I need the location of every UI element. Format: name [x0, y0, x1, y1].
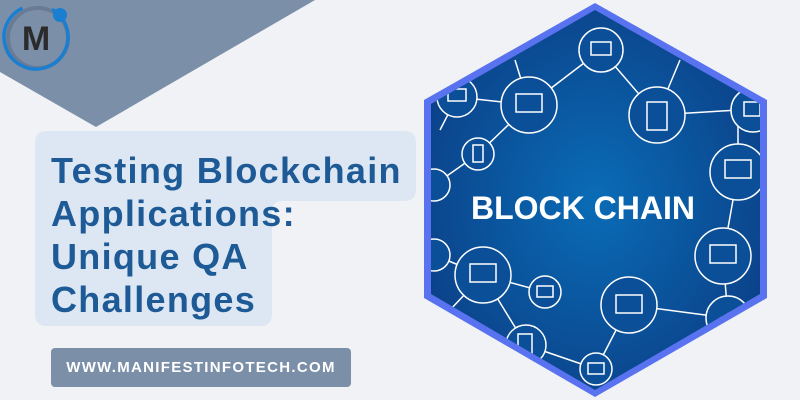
title text: Testing Blockchain: [51, 150, 402, 191]
blockchain hexagon image: [424, 3, 767, 397]
title panel: [35, 131, 416, 326]
logo: [2, 6, 70, 71]
title text: Unique QA: [51, 236, 249, 277]
url button: [51, 348, 351, 387]
logo: M: [22, 20, 50, 58]
block chain label: BLOCK CHAIN: [471, 190, 695, 226]
title text: [51, 150, 402, 320]
url button: WWW.MANIFESTINFOTECH.COM: [66, 359, 336, 376]
title text: Challenges: [51, 279, 256, 320]
title text: Applications:: [51, 193, 296, 234]
